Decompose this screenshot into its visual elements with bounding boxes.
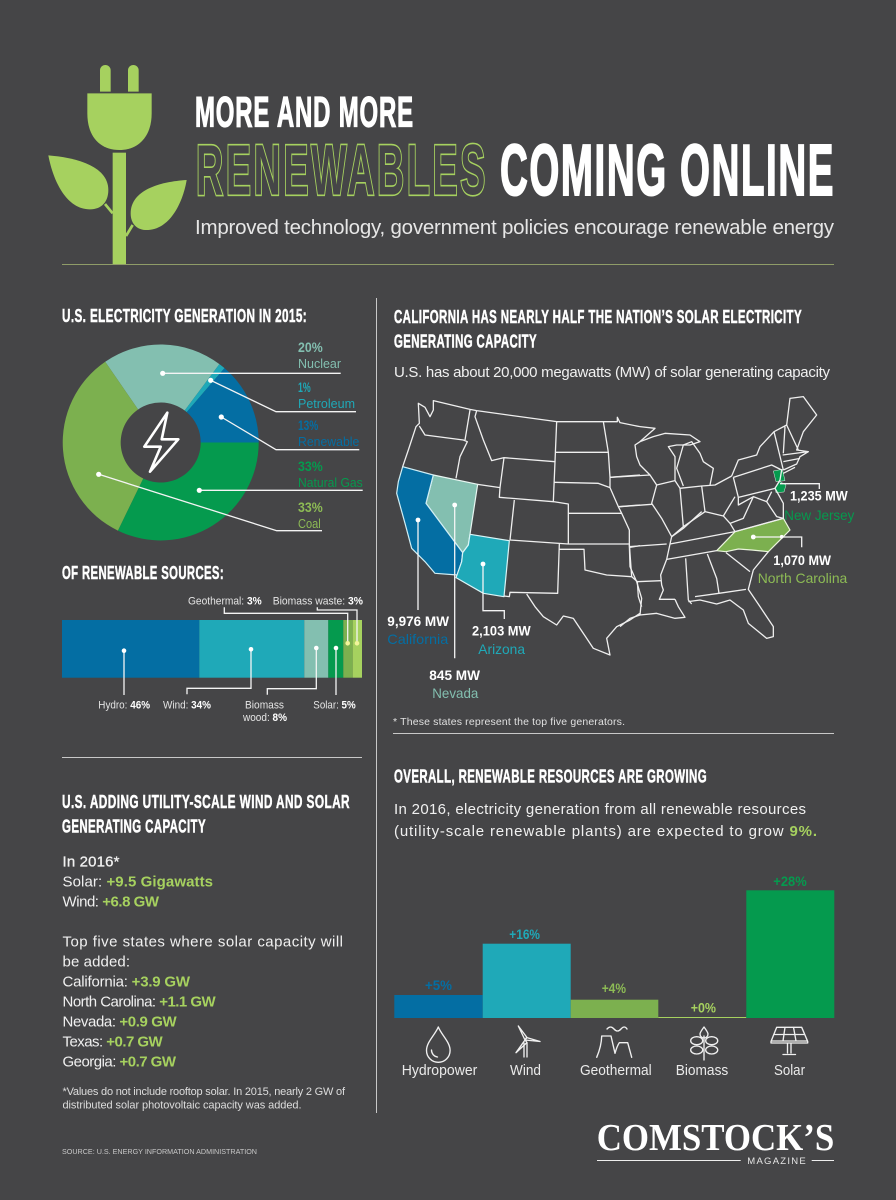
chart category labels: Wind bbox=[510, 1063, 541, 1079]
text block: 2016 additions: Solar: +9.5 Gigawatts bbox=[62, 874, 213, 891]
donut legend: Nuclear bbox=[298, 356, 342, 371]
donut legend: 33% bbox=[298, 458, 323, 474]
donut legend: Natural Gas bbox=[298, 475, 363, 490]
bar labels: Biomass waste: 3% bbox=[273, 595, 363, 607]
donut legend: 1% bbox=[298, 379, 311, 395]
bar chart: growth by source: +5% bbox=[425, 977, 453, 993]
title: RENEWABLES bbox=[196, 132, 488, 210]
heading: utility-scale wind and solar: GENERATING CAPACITY bbox=[62, 817, 206, 837]
western states bbox=[397, 401, 642, 655]
text block: 2016 additions: North Carolina: +1.1 GW bbox=[62, 993, 217, 1010]
map labels: California bbox=[387, 631, 449, 647]
icon: solar panel bbox=[771, 1027, 808, 1054]
icon: plug plant bbox=[48, 65, 187, 264]
bar chart: growth by source: +0% bbox=[691, 1000, 716, 1016]
heading: utility-scale wind and solar bbox=[62, 792, 350, 837]
text block: overall growth: In 2016, electricity generation from all renewable resources bbox=[394, 801, 806, 818]
map labels: 1,070 MW bbox=[773, 553, 831, 568]
map labels: 1,235 MW bbox=[790, 489, 848, 504]
source: SOURCE: U.S. ENERGY INFORMATION ADMINISTRATION bbox=[62, 1147, 257, 1156]
eastern states bbox=[610, 397, 817, 638]
text block: 2016 additions: In 2016* bbox=[62, 854, 120, 871]
text block: 2016 additions: Wind: +6.8 GW bbox=[62, 894, 160, 911]
bar labels: Wind: 34% bbox=[163, 699, 211, 711]
subheading: solar capacity: U.S. has about 20,000 megawatts (MW) of solar generating capacity bbox=[394, 364, 830, 381]
chart category labels: Solar bbox=[774, 1063, 805, 1079]
text block: 2016 additions: Georgia: +0.7 GW bbox=[62, 1053, 177, 1070]
heading: electricity generation: U.S. ELECTRICITY GENERATION IN 2015: bbox=[62, 306, 307, 326]
bar labels: wood: 8% bbox=[242, 712, 287, 724]
icon: wind turbine bbox=[516, 1026, 540, 1057]
donut legend: 33% bbox=[298, 499, 323, 515]
bar labels: Solar: 5% bbox=[313, 699, 356, 711]
icon: biomass plant bbox=[691, 1027, 718, 1060]
heading: California solar bbox=[394, 307, 802, 351]
text block: 2016 additions: Top five states where solar capacity will bbox=[62, 933, 343, 950]
donut legend: Petroleum bbox=[298, 396, 355, 411]
chart category labels: Geothermal bbox=[580, 1063, 652, 1079]
donut chart: electricity generation bbox=[63, 345, 259, 540]
bar labels bbox=[98, 595, 363, 724]
map labels: 2,103 MW bbox=[472, 624, 531, 639]
logo: Comstock's Magazine: MAGAZINE bbox=[747, 1156, 806, 1167]
text block: 2016 additions bbox=[62, 854, 343, 1070]
map: United States bbox=[397, 397, 817, 655]
map labels: Nevada bbox=[432, 685, 478, 701]
icon: geothermal plant bbox=[597, 1027, 632, 1057]
donut leader lines bbox=[96, 371, 363, 531]
bar labels: Biomass bbox=[245, 699, 284, 711]
footnote: top five: * These states represent the top five generators. bbox=[393, 716, 625, 728]
map labels: New Jersey bbox=[784, 507, 854, 523]
heading: California solar: GENERATING CAPACITY bbox=[394, 331, 537, 351]
donut legend: Renewable bbox=[298, 434, 359, 449]
bar labels: Geothermal: 3% bbox=[188, 595, 262, 607]
donut legend: Coal bbox=[298, 516, 321, 531]
bar chart: growth by source: +4% bbox=[602, 980, 626, 996]
chart category labels: Biomass bbox=[676, 1063, 728, 1079]
text block: overall growth: (utility-scale renewable plants) are expected to grow 9%. bbox=[394, 823, 817, 840]
text block: 2016 additions: Texas: +0.7 GW bbox=[62, 1033, 164, 1050]
heading: overall growth: OVERALL, RENEWABLE RESOURCES ARE GROWING bbox=[394, 766, 707, 786]
footnote: rooftop solar: *Values do not include rooftop solar. In 2015, nearly 2 GW of bbox=[62, 1086, 346, 1098]
footnote: rooftop solar: distributed solar photovoltaic capacity was added. bbox=[62, 1100, 302, 1112]
bar chart: growth by source: +16% bbox=[509, 926, 540, 942]
subtitle: Improved technology, government policies encourage renewable energy bbox=[195, 216, 835, 239]
map leader lines bbox=[416, 484, 819, 658]
donut legend bbox=[298, 339, 363, 531]
donut legend: 20% bbox=[298, 339, 323, 355]
icon: hydropower drop bbox=[426, 1027, 450, 1062]
text block: overall growth bbox=[394, 801, 817, 840]
stacked bar: renewable sources bbox=[62, 607, 362, 695]
title: MORE AND MORE bbox=[195, 88, 414, 136]
map labels bbox=[387, 489, 854, 701]
text block: 2016 additions: Nevada: +0.9 GW bbox=[62, 1013, 178, 1030]
bar chart: growth by source bbox=[394, 873, 834, 1018]
map labels: North Carolina bbox=[758, 570, 848, 586]
chart category labels: Hydropower bbox=[402, 1063, 477, 1079]
donut legend: 13% bbox=[298, 417, 319, 433]
heading: renewable sources: OF RENEWABLE SOURCES: bbox=[62, 563, 224, 583]
text block: 2016 additions: be added: bbox=[62, 953, 130, 970]
map labels: 9,976 MW bbox=[387, 614, 449, 629]
bar labels: Hydro: 46% bbox=[98, 699, 150, 711]
icon: lightning bolt bbox=[144, 413, 178, 472]
title bbox=[195, 88, 835, 211]
map labels: Arizona bbox=[478, 641, 525, 657]
bar chart: growth by source: +28% bbox=[773, 873, 807, 889]
footnote: rooftop solar bbox=[62, 1086, 346, 1112]
chart category labels bbox=[402, 1063, 805, 1079]
logo: Comstock's Magazine: COMSTOCK’S bbox=[597, 1117, 834, 1159]
map labels: 845 MW bbox=[429, 668, 480, 683]
heading: utility-scale wind and solar: U.S. ADDING UTILITY-SCALE WIND AND SOLAR bbox=[62, 792, 350, 812]
text block: 2016 additions: California: +3.9 GW bbox=[62, 973, 191, 990]
